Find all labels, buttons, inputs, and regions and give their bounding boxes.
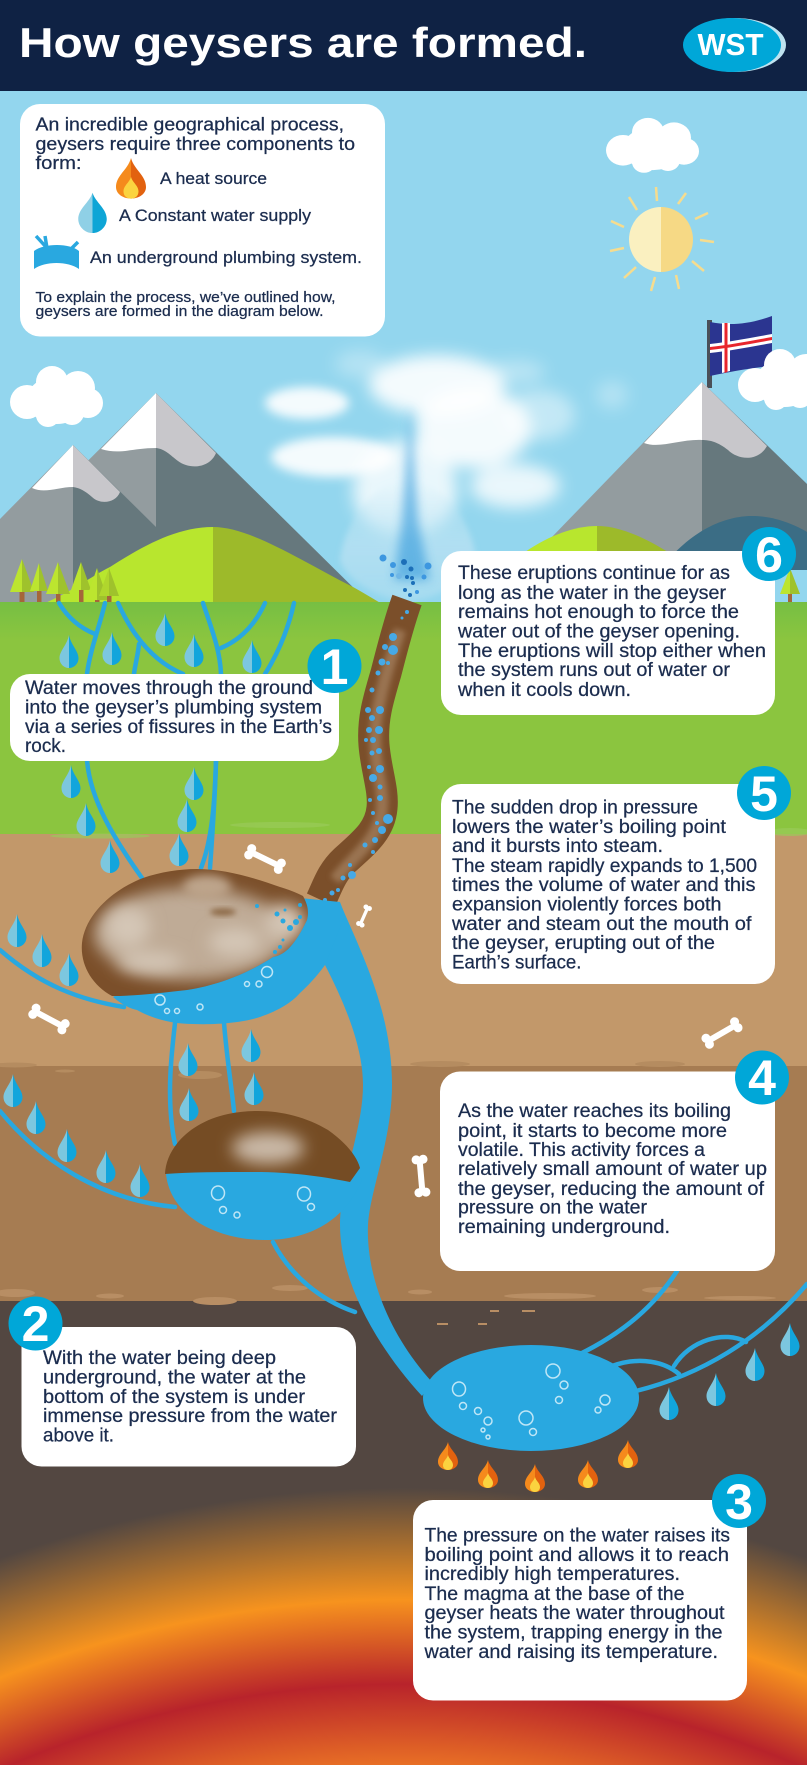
panel: step 2: bottom of the system is under [43,1387,306,1408]
header bar [0,0,807,91]
panel: intro [20,104,385,336]
panel: step 4: remaining underground. [458,1217,670,1238]
badge: 4 [735,1050,789,1106]
title: How geysers are formed. [19,19,587,66]
icon: plumbing [34,236,79,269]
panel: step 3: The pressure on the water raises its [424,1526,730,1546]
panel: step 5: water and steam out the mouth of [451,914,752,935]
panel: intro: To explain the process, we’ve outlined how, [36,290,336,306]
chamber 2: rock and water [165,1111,362,1240]
badge: 1 [308,639,362,695]
panel: intro: geysers are formed in the diagram below. [36,304,324,320]
logo: WST: WST [698,27,764,62]
panel: step 1: rock. [25,736,66,757]
badge: 2 [8,1296,62,1352]
panel: step 6: water out of the geyser opening. [457,622,740,642]
panel: step 4: As the water reaches its boiling [458,1101,731,1122]
panel: step 6: when it cools down. [457,680,631,701]
cloud: right [738,349,807,410]
geyser steam plume [265,350,628,602]
panel: step 6: The eruptions will stop either when [458,641,766,662]
panel: step 5 [441,766,791,984]
panel: intro: A heat source [160,170,267,188]
icon: flame [116,158,146,199]
panel: step 4: point, it starts to become more [458,1121,727,1142]
trees left [10,559,119,614]
panel: step 2: underground, the water at the [43,1368,306,1388]
panel: step 1 [10,639,362,761]
panel: step 5: Earth’s surface. [452,952,582,974]
icons: water drops [4,613,800,1420]
ground layers [0,602,807,1765]
badge: 2: 2 [22,1296,49,1352]
panel: step 4 [440,1050,789,1271]
panel: intro: A Constant water supply [119,207,312,225]
badge: 4: 4 [748,1050,776,1106]
badge: 3: 3 [725,1474,753,1530]
hill: right [525,526,668,610]
chamber 3: water [423,1345,639,1451]
cloud: left [10,366,103,427]
icon: sun [610,187,714,291]
panel: step 3 [413,1474,766,1700]
hill: left [43,527,382,610]
thin fissures [0,603,807,1391]
panel: step 3: boiling point and allows it to reach [424,1545,729,1566]
panel: step 5: and it bursts into steam. [452,836,663,857]
logo: WST [683,18,786,72]
icons: bones [27,843,744,1198]
panel: step 4: pressure on the water [458,1198,648,1218]
panel: step 2 [8,1296,356,1466]
tree right [780,568,800,606]
panel: intro: An underground plumbing system. [90,249,362,267]
panel: step 6: remains hot enough to force the [458,602,739,623]
icon: water drop [78,193,107,233]
badge: 6: 6 [755,527,783,583]
panel: step 4: relatively small amount of water up [458,1159,767,1180]
chamber 1: rock and water [82,869,345,1024]
panel: step 6: These eruptions continue for as [458,563,730,584]
panel: step 4: volatile. This activity forces a [458,1140,705,1161]
panel: intro: form: [36,152,82,173]
panel: step 1: into the geyser’s plumbing system [25,698,322,718]
panel: step 4: the geyser, reducing the amount of [458,1179,765,1200]
panel: step 5: The sudden drop in pressure [452,798,698,818]
panel: step 2: above it. [43,1426,114,1446]
panel: step 5: The steam rapidly expands to 1,500 [452,856,757,877]
badge: 3 [712,1474,766,1530]
badge: 1: 1 [321,639,348,695]
main blue pipe [325,903,432,1396]
panel: step 5: expansion violently forces both [452,894,722,916]
mountain right [520,382,807,570]
panel: intro: geysers require three components to [36,133,355,154]
badge: 5: 5 [750,766,778,822]
panel: step 5: times the volume of water and this [452,875,756,896]
panel: step 3: incredibly high temperatures. [424,1564,680,1585]
panel: intro: An incredible geographical process, [36,114,344,134]
geyser tube [321,600,409,902]
panel: step 1: via a series of fissures in the Earth’s [25,717,332,738]
sky background [0,91,807,611]
panel: step 5: the geyser, erupting out of the [452,933,715,954]
panel: step 3: geyser heats the water throughout [424,1603,725,1624]
icon: Iceland flag [707,316,772,388]
panel: step 6: the system runs out of water or [458,660,731,681]
panel: step 2: immense pressure from the water [43,1406,338,1427]
panel: step 3: the system, trapping energy in the [424,1622,722,1644]
panel: step 6: long as the water in the geyser [458,583,727,604]
icons: flames under chamber [438,1440,638,1492]
panel: step 2: With the water being deep [43,1348,276,1369]
panel: step 1: Water moves through the ground [25,678,313,699]
panel: step 6 [441,527,796,715]
panel: step 3: The magma at the base of the [424,1584,684,1605]
panel: step 5: lowers the water’s boiling point [452,817,727,838]
badge: 5 [737,766,791,822]
cloud: top right [606,118,699,173]
panel: step 3: water and raising its temperature. [423,1642,718,1663]
badge: 6 [742,527,796,583]
mountains left [0,393,372,610]
